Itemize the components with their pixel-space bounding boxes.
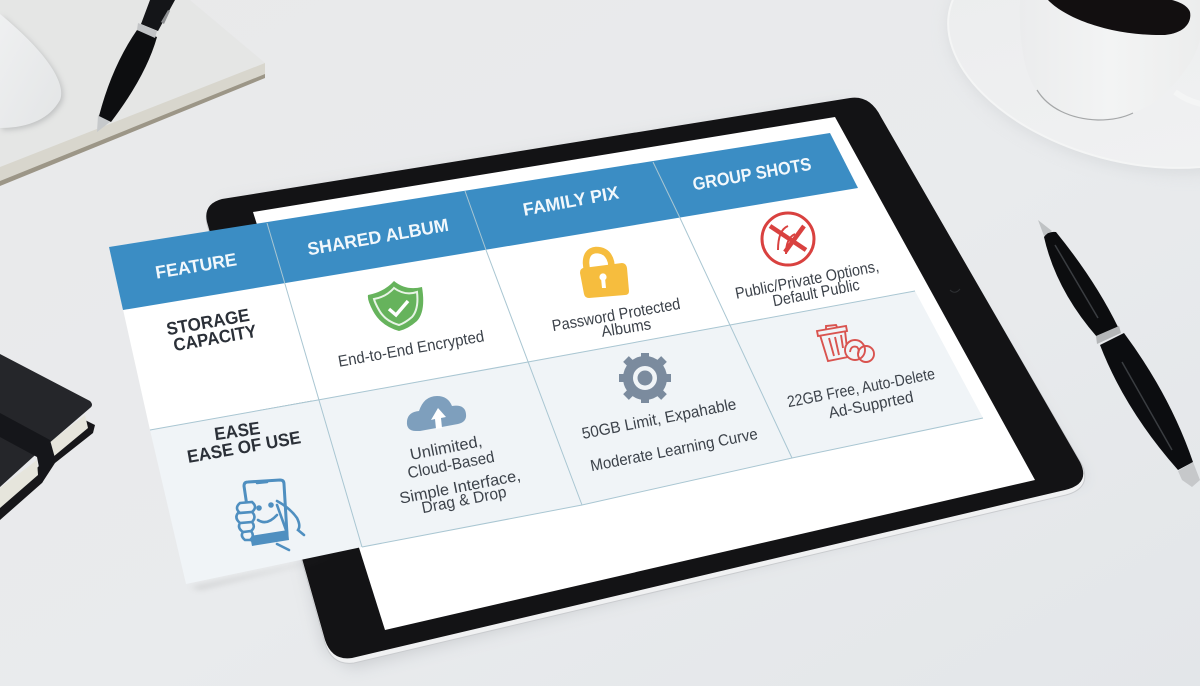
text: public/private options: Public/Private Options, — [734, 258, 880, 303]
white row one and first-column body — [109, 188, 915, 430]
text: unlimited cloud-based, simple interface, drag and drop: Simple Interface, — [398, 468, 522, 508]
comparison table card — [109, 133, 983, 590]
row label: ease of use: EASE OF USE — [186, 427, 302, 467]
row label: storage capacity: STORAGE — [165, 305, 251, 339]
tinted row two — [150, 291, 983, 584]
text: unlimited cloud-based, simple interface, drag and drop: Cloud-Based — [406, 449, 496, 482]
header: shared album: SHARED ALBUM — [306, 215, 450, 259]
header band — [109, 133, 858, 310]
cup handle — [1175, 92, 1200, 106]
elastic strap — [0, 413, 55, 483]
tablet bezel — [206, 98, 1083, 658]
saucer — [923, 0, 1200, 211]
text: unlimited cloud-based, simple interface, drag and drop: Drag & Drop — [420, 484, 508, 517]
text: 22GB free and ad-supported: Ad-Supprted — [827, 389, 915, 422]
text: unlimited cloud-based, simple interface, drag and drop: Unlimited, — [409, 433, 484, 464]
back cover — [0, 420, 95, 520]
row label: storage capacity — [165, 305, 258, 355]
text: unlimited cloud-based, simple interface, drag and drop — [398, 433, 522, 517]
text: 50GB limit and learning curve: 50GB Limit, Expahable — [580, 396, 738, 443]
icon: cloud upload — [407, 396, 466, 431]
icon: yellow padlock — [580, 250, 629, 298]
tablet screen — [253, 117, 1035, 630]
cup body — [1020, 0, 1200, 119]
black notebook, left — [0, 354, 95, 520]
coffee — [1048, 0, 1190, 35]
coffee cup and saucer — [923, 0, 1200, 211]
header: family pix: FAMILY PIX — [521, 182, 620, 220]
tablet shadow — [222, 104, 1085, 668]
text: 50GB limit and learning curve: Moderate Learning Curve — [589, 426, 759, 475]
right pen — [1038, 220, 1200, 487]
tablet — [206, 98, 1085, 668]
header: group shots: GROUP SHOTS — [691, 154, 813, 194]
computer mouse — [0, 14, 63, 130]
card shadow — [190, 551, 362, 590]
text: public/private options: Default Public — [771, 277, 861, 310]
header labels — [154, 154, 813, 283]
notebook under pen — [0, 0, 265, 186]
text: 50GB limit and learning curve — [580, 396, 759, 475]
tablet camera — [950, 289, 960, 292]
header: feature: FEATURE — [154, 249, 238, 283]
front cover — [0, 354, 92, 487]
icon: green shield — [368, 281, 423, 331]
row label: storage capacity: CAPACITY — [172, 321, 258, 355]
black pen, top left — [97, 0, 175, 132]
icon: gear — [619, 353, 671, 403]
text: 22GB free and ad-supported: 22GB Free, Auto-Delete — [786, 366, 936, 411]
row label: ease of use: EASE — [213, 418, 261, 444]
icon: hand holding smartphone — [236, 480, 304, 550]
text: 22GB free and ad-supported — [786, 366, 936, 422]
icon: red trash can with circles — [817, 325, 874, 362]
pages — [50, 415, 88, 457]
text: password protected albums: Password Protected — [551, 296, 682, 335]
tablet silver edge — [206, 100, 1085, 663]
text: end-to-end encrypted: End-to-End Encrypted — [337, 328, 486, 371]
icon: red prohibited sign — [762, 213, 814, 265]
text: password protected albums: Albums — [600, 316, 652, 341]
grid lines — [150, 162, 983, 547]
